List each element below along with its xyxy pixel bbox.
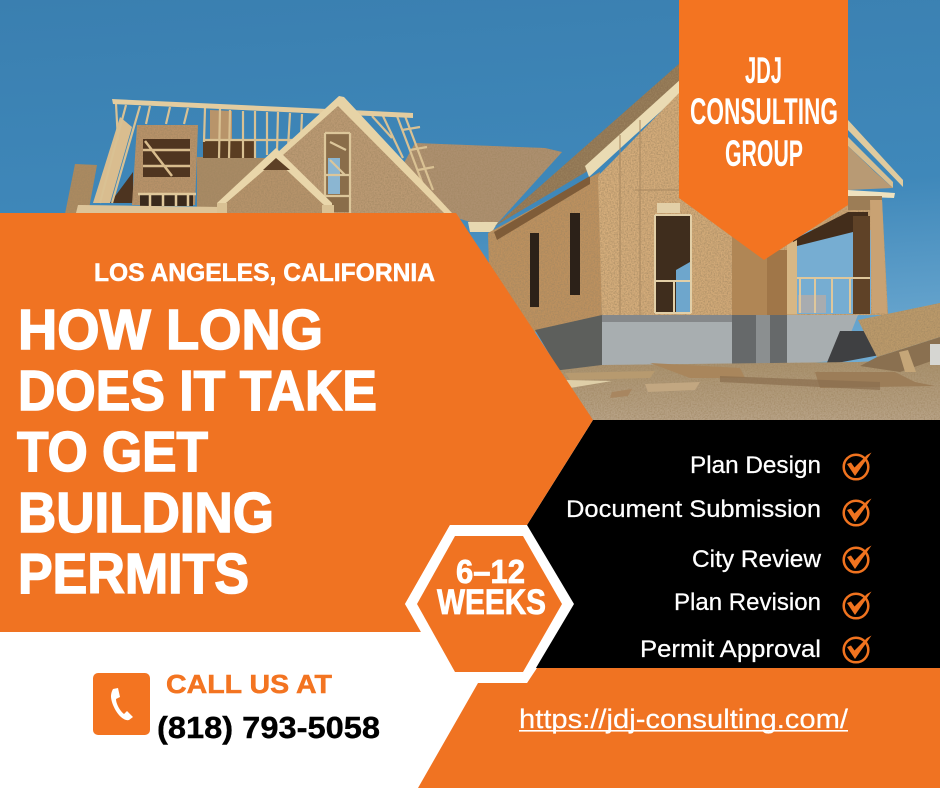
hexagon badge: 6–12 weeks: 6–12 <box>456 553 525 590</box>
photo: main house wall, front <box>598 92 888 317</box>
item: Plan Revision: Plan Revision <box>674 589 821 616</box>
panel: white footer background <box>0 632 480 788</box>
photo: left dormer <box>76 125 222 213</box>
icon: phone <box>93 673 150 735</box>
panel: orange title <box>0 213 593 632</box>
item: City Review: City Review <box>692 546 822 573</box>
photo: back roof <box>65 143 562 226</box>
panel: orange website footer <box>418 668 940 788</box>
title: HOW LONG <box>18 298 323 362</box>
item: Plan Design: Plan Design <box>690 452 821 479</box>
call us label: CALL US AT <box>166 669 332 699</box>
item: Plan Revision <box>674 589 872 618</box>
panel: black checklist <box>500 420 940 668</box>
photo: large gable <box>270 96 452 214</box>
photo: right roof edge <box>848 120 903 313</box>
phone number: (818) 793-5058 <box>157 710 380 745</box>
item: Permit Approval: Permit Approval <box>640 636 821 663</box>
banner: JDJ Consulting Group: JDJ <box>745 50 782 91</box>
title <box>17 298 377 606</box>
title: DOES IT TAKE <box>18 359 377 423</box>
photo: ground and debris <box>545 358 940 421</box>
background photo: house under construction <box>0 0 940 425</box>
banner: JDJ Consulting Group: GROUP <box>725 133 803 174</box>
photo: concrete foundation <box>535 315 880 372</box>
banner: JDJ Consulting Group <box>679 0 848 260</box>
title: PERMITS <box>18 542 249 606</box>
photo: centre window <box>655 203 691 313</box>
title: TO GET <box>17 420 208 484</box>
photo: small gable <box>217 148 334 214</box>
photo: main roof <box>495 63 700 226</box>
photo: open roof framing <box>93 99 434 203</box>
photo: main house wall, side <box>488 172 602 332</box>
item: City Review <box>692 546 872 573</box>
title: BUILDING <box>18 481 274 545</box>
photo: leaning plywood and bucket <box>858 303 940 372</box>
hexagon badge: 6–12 weeks <box>405 525 574 683</box>
photo: sky <box>0 0 940 425</box>
photo: eave trim <box>468 222 498 232</box>
website link: https://jdj-consulting.com/ <box>519 704 849 734</box>
hexagon badge: 6–12 weeks: WEEKS <box>437 583 546 622</box>
item: Document Submission: Document Submission <box>566 496 821 523</box>
banner: JDJ Consulting Group: CONSULTING <box>690 91 838 132</box>
photo: porch opening <box>787 212 871 314</box>
location text: LOS ANGELES, CALIFORNIA <box>94 259 435 287</box>
checklist <box>566 452 872 663</box>
